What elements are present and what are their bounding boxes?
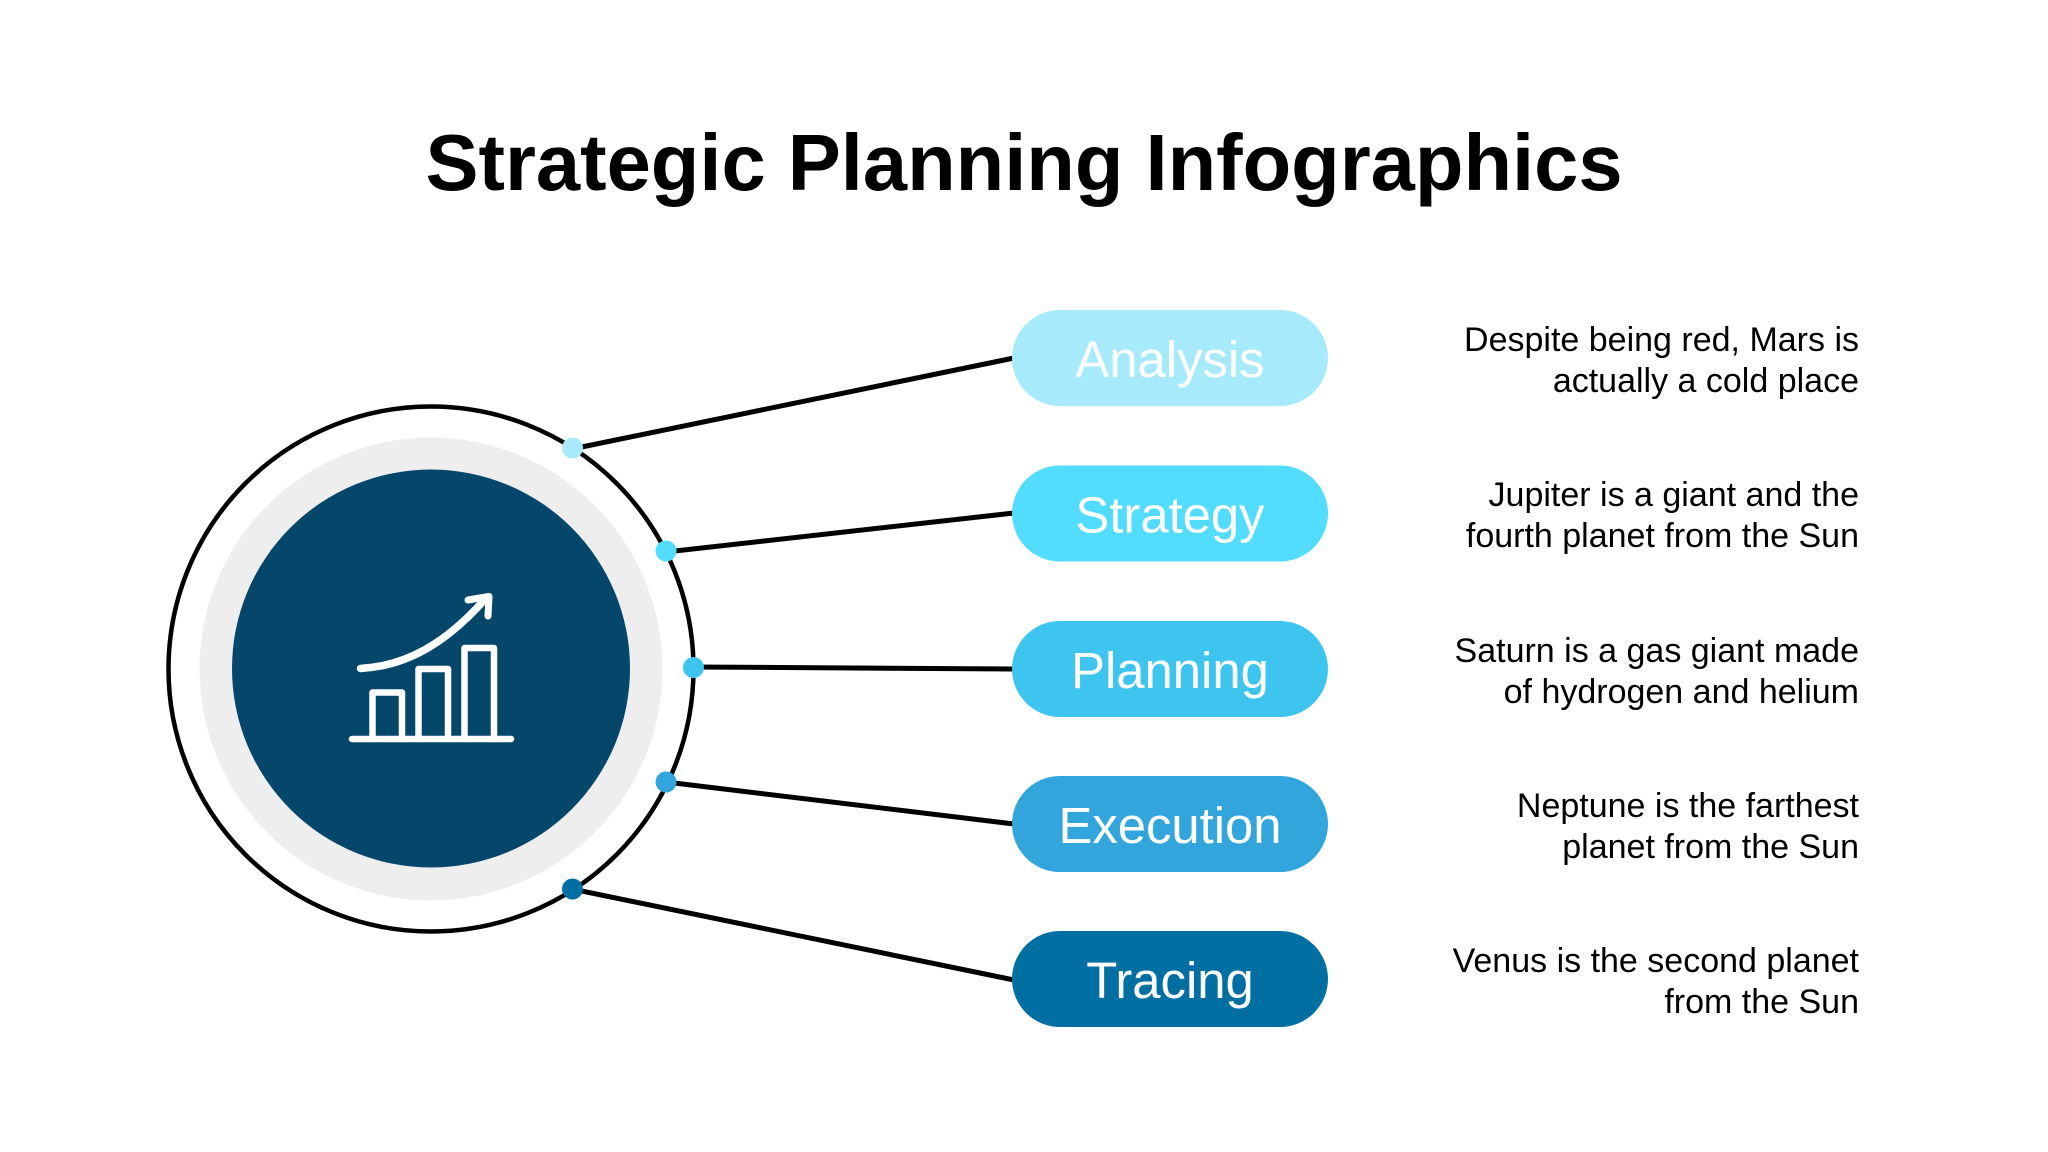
description: Analysis <box>1464 321 1859 400</box>
description: Strategy: Jupiter is a giant and the <box>1489 476 1859 514</box>
description: Tracing: from the Sun <box>1664 983 1859 1021</box>
description: Planning: Saturn is a gas giant made <box>1455 632 1859 670</box>
pill: Tracing: Tracing <box>1086 952 1254 1009</box>
navy disc <box>232 470 630 868</box>
icon: growth bar chart with arrow <box>352 596 511 739</box>
description: Analysis: Despite being red, Mars is <box>1464 321 1859 359</box>
description: Execution: planet from the Sun <box>1562 828 1859 866</box>
pill: Analysis <box>1012 310 1328 406</box>
description: Analysis: actually a cold place <box>1553 362 1859 400</box>
description: Execution: Neptune is the farthest <box>1517 787 1860 825</box>
node dots <box>562 438 704 900</box>
pill: Execution: Execution <box>1058 797 1282 854</box>
pill: Strategy <box>1012 466 1328 562</box>
description: Tracing: Venus is the second planet <box>1453 942 1860 980</box>
pill: Execution <box>1012 776 1328 872</box>
description: Tracing <box>1453 942 1860 1021</box>
pill: Tracing <box>1012 931 1328 1027</box>
description: Planning <box>1455 632 1859 711</box>
pill: Strategy: Strategy <box>1075 486 1265 544</box>
description: Execution <box>1517 787 1860 866</box>
description: Planning: of hydrogen and helium <box>1504 673 1859 711</box>
pill: Planning: Planning <box>1071 642 1269 699</box>
description: Strategy <box>1466 476 1859 555</box>
title: Strategic Planning Infographics <box>425 118 1623 207</box>
grey ring <box>200 438 662 900</box>
connector lines <box>572 358 1014 980</box>
description: Strategy: fourth planet from the Sun <box>1466 517 1859 555</box>
pill: Planning <box>1012 621 1328 717</box>
pill: Analysis: Analysis <box>1075 331 1265 388</box>
outer ring <box>168 406 694 932</box>
central circle graphic <box>168 406 694 932</box>
